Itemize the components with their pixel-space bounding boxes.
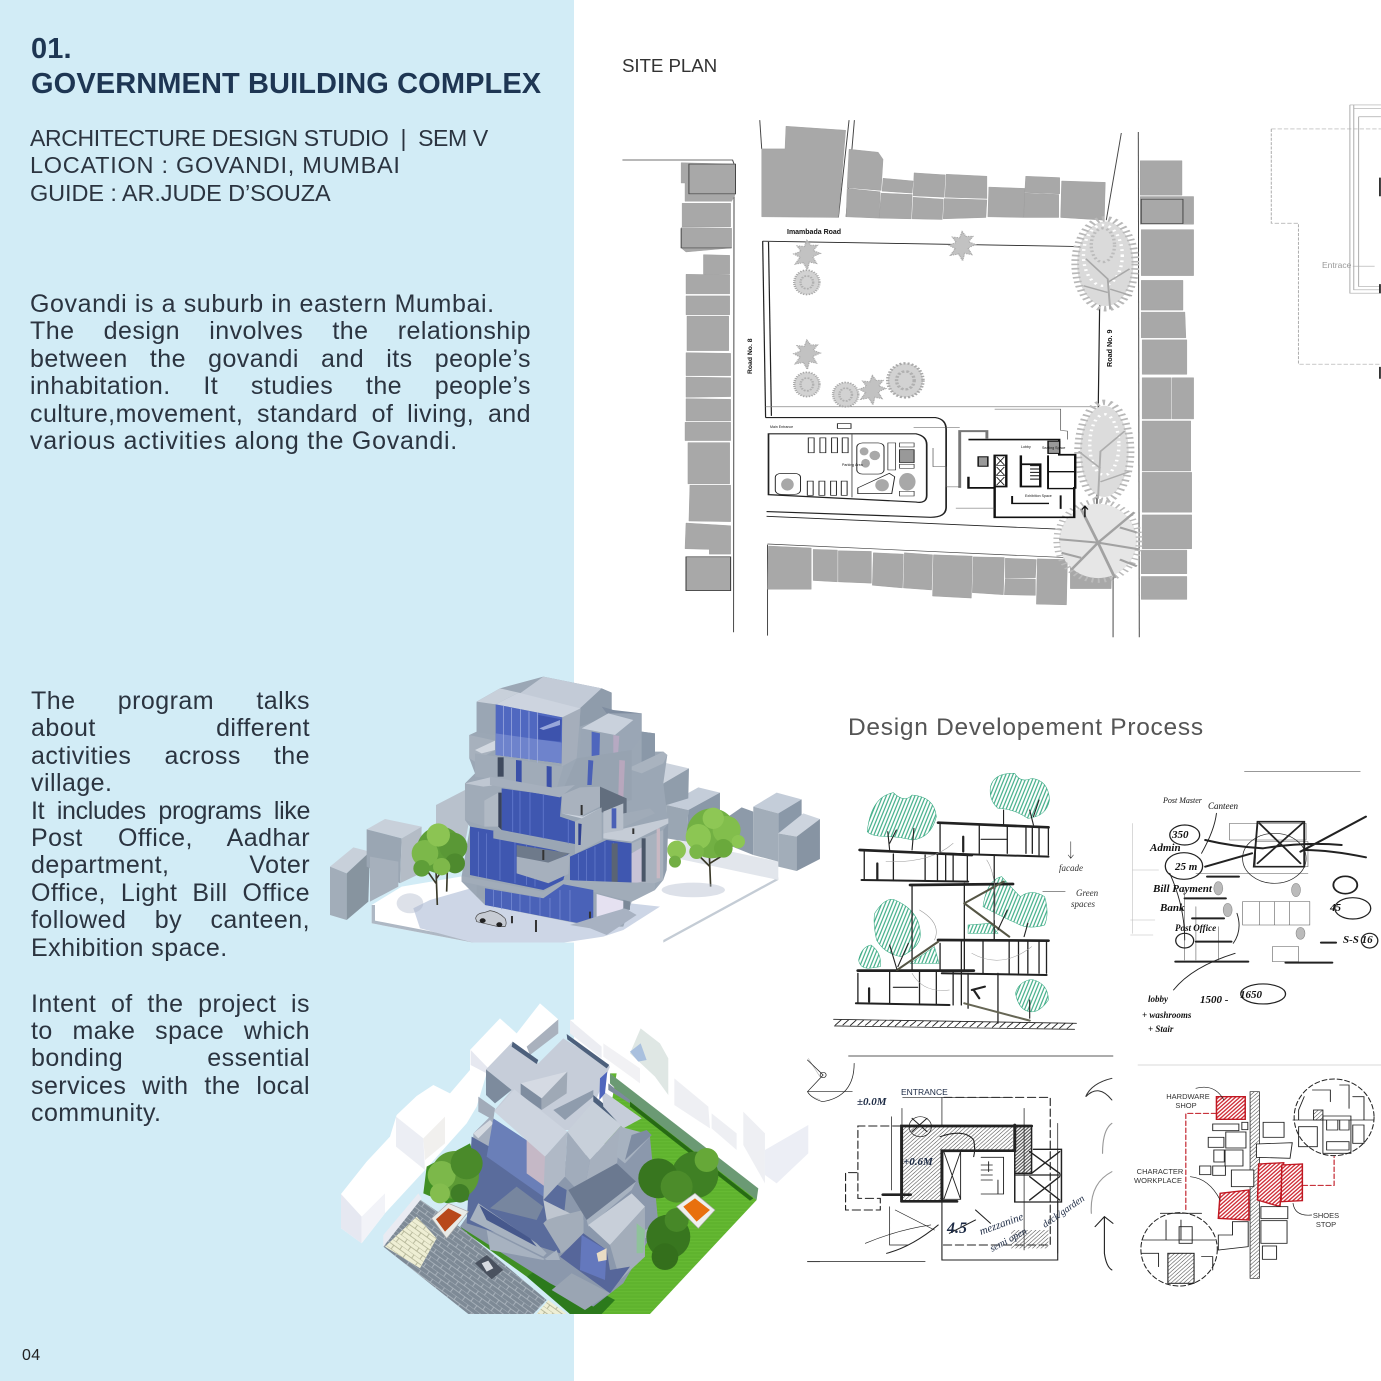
program paragraph: The program talks bbox=[31, 687, 310, 715]
sketch 4 labels: CHARACTER bbox=[1137, 1167, 1184, 1176]
main building plan bbox=[914, 409, 1088, 517]
intro paragraph: The design involves the relationship bbox=[30, 317, 531, 345]
large tree east bbox=[1078, 402, 1131, 500]
program paragraph: department, Voter bbox=[31, 851, 310, 879]
sketch 2 notes: Admin bbox=[1149, 842, 1181, 854]
sketch 2 notes: + Stair bbox=[1148, 1024, 1174, 1034]
floor slabs bbox=[856, 823, 1048, 1005]
people bbox=[869, 837, 963, 1002]
hatched mezzanine bbox=[1011, 1230, 1048, 1248]
planter trees in parking bbox=[781, 447, 916, 491]
site plan labels: Parking Area bbox=[842, 463, 863, 467]
sketch 2 notes: + washrooms bbox=[1142, 1010, 1192, 1020]
green hatched trees bbox=[859, 773, 1049, 1012]
large tree north east bbox=[1075, 219, 1135, 309]
small tree marks bbox=[1214, 882, 1305, 939]
planters bbox=[432, 1193, 715, 1238]
sketch 3 notes: deck/garden bbox=[1040, 1193, 1087, 1230]
intent paragraph bbox=[31, 990, 310, 1127]
sketch 2 notes: Post Office bbox=[1175, 923, 1216, 933]
lower terraces bbox=[487, 1163, 658, 1310]
project details: GUIDE : AR.JUDE D’SOUZA bbox=[30, 180, 331, 206]
tree right bbox=[667, 808, 745, 887]
program paragraph: activities across the bbox=[31, 742, 310, 770]
title: GOVERNMENT BUILDING COMPLEX bbox=[31, 68, 541, 100]
sketch 1 notes bbox=[1059, 863, 1099, 909]
title bbox=[31, 33, 541, 100]
site trees bbox=[794, 219, 1139, 580]
sketch 2 notes bbox=[1142, 796, 1373, 1034]
building outlines over blocks bbox=[681, 164, 1183, 248]
ground floor bbox=[477, 884, 637, 935]
skyline sketch bottom bbox=[1142, 1213, 1215, 1283]
site plan heading: SITE PLAN bbox=[622, 55, 717, 76]
sketch 3 notes bbox=[857, 1087, 1087, 1255]
car bbox=[475, 1255, 503, 1279]
site plan labels: Seating Space bbox=[1042, 446, 1065, 450]
sketch 2 notes: 1650 bbox=[1240, 989, 1262, 1001]
road strip bbox=[1138, 1065, 1381, 1278]
sketch 2 notes: Canteen bbox=[1208, 801, 1238, 811]
program paragraph bbox=[31, 687, 310, 962]
right sheet fragment bbox=[1271, 105, 1381, 379]
skyline sketch top bbox=[1293, 1085, 1373, 1153]
program paragraph: about different bbox=[31, 714, 310, 742]
project details: LOCATION : GOVANDI, MUMBAI bbox=[30, 152, 401, 178]
intent paragraph: bonding essential bbox=[31, 1044, 310, 1072]
sketch 4 labels: WORKPLACE bbox=[1134, 1176, 1182, 1185]
arrows bbox=[1043, 842, 1073, 892]
intent paragraph: to make space which bbox=[31, 1017, 310, 1045]
intro paragraph: between the govandi and its people’s bbox=[30, 345, 531, 373]
intent paragraph: services with the local bbox=[31, 1072, 310, 1100]
sketch 3 notes: ±0.0M bbox=[857, 1096, 888, 1108]
sketch 2 notes: 1500 - bbox=[1200, 994, 1229, 1006]
site plan labels: Road No. 9 bbox=[1105, 329, 1114, 367]
large branching tree south east bbox=[1057, 501, 1139, 580]
neighbouring blocks bbox=[330, 762, 820, 920]
intent paragraph: community. bbox=[31, 1099, 161, 1127]
program paragraph: Post Office, Aadhar bbox=[31, 824, 310, 852]
black blocks bbox=[1200, 1122, 1292, 1259]
hatched lobby bbox=[903, 1125, 1013, 1200]
top volume bbox=[469, 688, 581, 788]
site plan labels: Imambada Road bbox=[787, 229, 841, 236]
program paragraph: village. bbox=[31, 769, 112, 797]
trees bbox=[428, 1147, 719, 1270]
main block massing bbox=[460, 1113, 658, 1307]
sketch 4 labels: SHOES bbox=[1313, 1211, 1339, 1220]
project details: ARCHITECTURE DESIGN STUDIO | SEM V bbox=[30, 125, 488, 151]
sketch 2 notes: Bill Payment bbox=[1152, 883, 1213, 895]
sketch: ground floor plan bbox=[807, 1056, 1113, 1270]
program paragraph: followed by canteen, bbox=[31, 906, 310, 934]
sketch 1 notes: spaces bbox=[1071, 899, 1095, 909]
program paragraph: Office, Light Bill Office bbox=[31, 879, 310, 907]
sketch 3 notes: ENTRANCE bbox=[901, 1087, 948, 1097]
plan details bbox=[942, 1149, 1061, 1260]
leader arrows bbox=[1190, 1087, 1312, 1215]
page number: 04 bbox=[22, 1347, 41, 1364]
site plan labels: Road No. 8 bbox=[747, 338, 754, 374]
ground hatching bbox=[834, 1019, 1076, 1029]
sketch 2 notes: 25 m bbox=[1174, 861, 1198, 873]
road edge lines bbox=[622, 120, 1139, 637]
sketch 3 notes: semi open bbox=[988, 1226, 1029, 1255]
site boundary bbox=[763, 241, 1100, 531]
render: front isometric view bbox=[330, 677, 820, 943]
columns bbox=[858, 823, 1048, 1023]
building rear upper volumes bbox=[520, 677, 667, 820]
render: aerial view with lawn bbox=[341, 1003, 820, 1314]
sketch 4 labels: HARDWARE bbox=[1166, 1092, 1210, 1101]
sketch 2 notes: 45 bbox=[1329, 902, 1342, 914]
tree trunks bbox=[888, 800, 1039, 1018]
sketch: urban diagram with red blocks bbox=[1138, 1065, 1381, 1286]
sketch 1 notes: facade bbox=[1059, 863, 1083, 873]
car and people bbox=[476, 805, 633, 932]
heavy slabs bbox=[1175, 817, 1366, 963]
dashed red links bbox=[1186, 1113, 1334, 1210]
intro paragraph: culture,movement, standard of living, and bbox=[30, 400, 531, 428]
tree shadows bbox=[397, 883, 725, 913]
neighbouring buildings bbox=[681, 126, 1194, 605]
site plan drawing bbox=[622, 105, 1381, 637]
program paragraph: It includes programs like bbox=[31, 797, 310, 825]
sketch: section with green spaces bbox=[834, 773, 1076, 1029]
tree left bbox=[412, 823, 467, 905]
roof masses bbox=[478, 1034, 652, 1200]
building silhouette base bbox=[462, 677, 668, 927]
intro paragraph: Govandi is a suburb in eastern Mumbai. bbox=[30, 290, 495, 318]
plaza ground bbox=[372, 840, 778, 943]
intro paragraph: inhabitation. It studies the people’s bbox=[30, 372, 531, 400]
sketch 2 notes: Bank bbox=[1159, 902, 1185, 914]
intro paragraph bbox=[30, 290, 531, 455]
intro paragraph: various activities along the Govandi. bbox=[30, 427, 458, 455]
sketch 1 notes: Green bbox=[1076, 888, 1099, 898]
sketch 4 labels: SHOP bbox=[1175, 1101, 1197, 1110]
white context buildings bbox=[341, 1003, 808, 1243]
middle stacks bbox=[465, 777, 668, 892]
leader curves bbox=[1170, 813, 1239, 990]
circled numbers bbox=[1165, 825, 1378, 1004]
site plan labels bbox=[747, 229, 1352, 498]
intent paragraph: Intent of the project is bbox=[31, 990, 310, 1018]
site plan labels: Entrace bbox=[1322, 260, 1352, 270]
sketch 2 notes: Post Master bbox=[1162, 796, 1203, 805]
sketch 4 labels bbox=[1134, 1092, 1339, 1229]
design development heading: Design Developement Process bbox=[848, 714, 1204, 741]
project details bbox=[30, 125, 488, 206]
floating slabs and terraces bbox=[462, 807, 655, 902]
scribbled strokes bbox=[887, 1078, 1113, 1270]
blue background panel bbox=[0, 0, 574, 1381]
sketch 3 notes: mezzanine bbox=[978, 1211, 1025, 1238]
stairs and ramps bbox=[897, 882, 1030, 1021]
sketch 2 notes: lobby bbox=[1148, 994, 1169, 1004]
site plan labels: Main Entrance bbox=[770, 425, 793, 429]
central crossed core bbox=[1254, 822, 1304, 867]
sketch 4 labels: STOP bbox=[1316, 1220, 1336, 1229]
sketch: sectional diagram with notes bbox=[1131, 772, 1378, 1004]
paper marks bbox=[807, 1058, 820, 1262]
detail circles bbox=[1141, 1079, 1374, 1286]
dashed site offset bbox=[846, 1097, 1050, 1245]
program paragraph: Exhibition space. bbox=[31, 934, 228, 962]
site plan labels: Exhibition Space bbox=[1025, 494, 1052, 498]
sketch 2 notes: S-S 16 bbox=[1343, 934, 1373, 946]
faint arcs bbox=[886, 843, 1032, 990]
sketch 3 notes: +0.6M bbox=[903, 1156, 934, 1168]
site plan labels: Lobby bbox=[1021, 445, 1031, 449]
lawn bbox=[423, 1073, 758, 1314]
sketch 2 notes: 350 bbox=[1171, 829, 1189, 841]
parking area plan bbox=[766, 418, 946, 517]
entrance and dims bbox=[807, 1056, 1113, 1262]
red blocks bbox=[1216, 1097, 1302, 1220]
paved forecourt bbox=[383, 1193, 567, 1314]
drawings and renders bbox=[330, 104, 1381, 1314]
thick plan walls bbox=[883, 1125, 1032, 1201]
grid blocks bbox=[1131, 772, 1360, 962]
sketch 3 notes: 4.5 bbox=[946, 1220, 967, 1237]
title: 01. bbox=[31, 33, 72, 65]
